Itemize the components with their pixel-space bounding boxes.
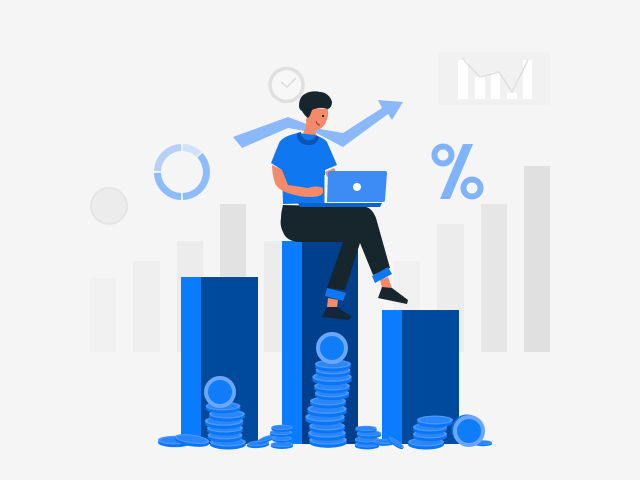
shirt xyxy=(271,133,337,204)
blue column middle xyxy=(282,241,358,444)
icon: percent sign xyxy=(434,144,480,199)
ankles xyxy=(380,277,392,288)
coins: right stack xyxy=(408,414,492,450)
collar xyxy=(297,132,319,145)
coins: left stack xyxy=(158,378,246,450)
coins: small right-centre stack xyxy=(355,426,405,451)
coins: small left-centre stack xyxy=(247,425,293,449)
neck and face xyxy=(302,108,328,141)
blue column right xyxy=(382,310,459,444)
icon: clock xyxy=(270,68,303,102)
background bar chart xyxy=(90,166,550,352)
person with laptop xyxy=(271,91,408,320)
shoes xyxy=(322,287,408,320)
hair xyxy=(299,91,332,118)
coins: tall centre stack xyxy=(305,334,352,448)
donut chart xyxy=(158,148,206,196)
laptop xyxy=(298,171,387,207)
trousers xyxy=(281,205,390,290)
face details xyxy=(316,115,324,125)
arm xyxy=(272,165,323,197)
small line and bar chart card xyxy=(438,52,550,105)
rising arrow xyxy=(233,100,403,148)
far hand xyxy=(325,168,336,177)
trouser cuffs xyxy=(325,267,392,301)
icon: gray circle xyxy=(91,188,127,224)
blue column left xyxy=(181,277,258,444)
